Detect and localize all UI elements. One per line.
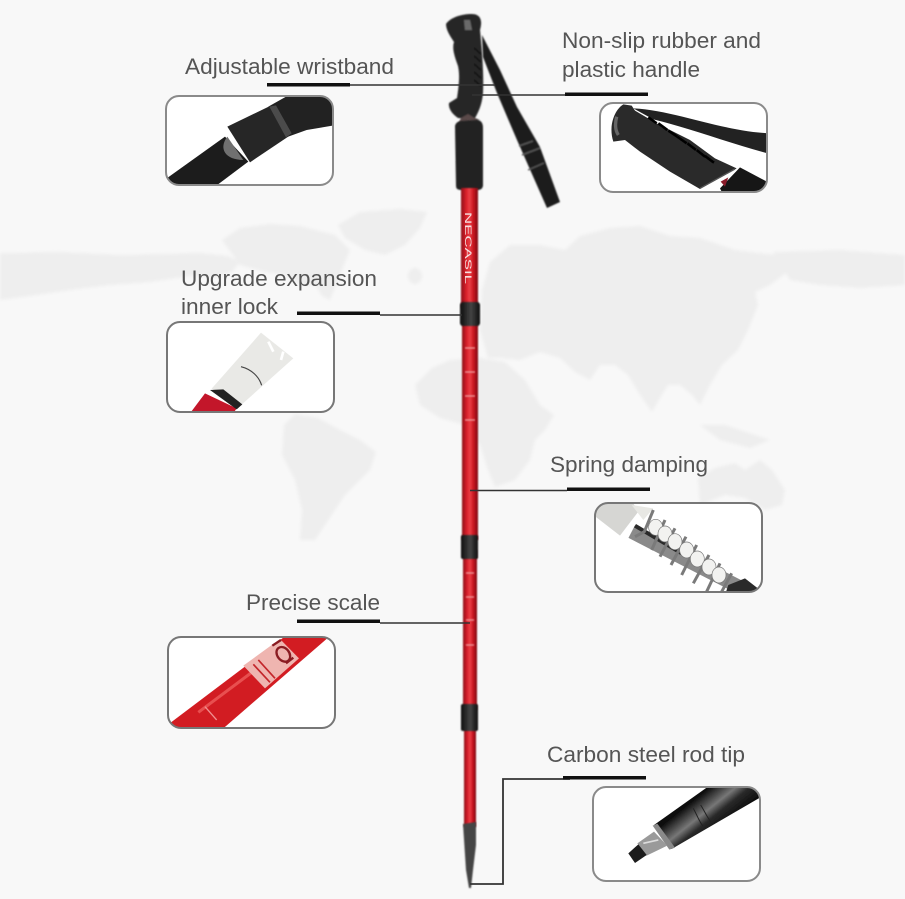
label second line: inner lock: [181, 294, 279, 319]
label: Adjustable wristband: [185, 54, 394, 79]
callout: spring damping: [470, 452, 762, 595]
label: Upgrade expansion: [181, 266, 377, 291]
label: Precise scale: [246, 590, 380, 615]
trekking pole: [446, 14, 560, 888]
leader line: [472, 94, 565, 96]
photo panel: [600, 103, 770, 195]
brand name: NECASIL: [462, 212, 473, 284]
label: Non-slip rubber and: [562, 28, 761, 53]
photo panel: [593, 503, 762, 595]
foam grip: [455, 120, 483, 190]
label second line: plastic handle: [562, 57, 700, 82]
leader line: [380, 622, 470, 624]
photo panel: [166, 93, 337, 187]
leader line: [470, 779, 570, 884]
aluminium shaft: [461, 188, 478, 827]
callout: handle: [472, 28, 770, 195]
rubber handle: [446, 14, 483, 124]
leader line: [470, 490, 567, 492]
lock collars: [460, 302, 480, 731]
callout: precise scale: [168, 590, 470, 729]
callout: carbon steel rod tip: [470, 742, 762, 884]
label: Spring damping: [550, 452, 708, 477]
leader line: [350, 84, 495, 86]
photo panel: [168, 636, 335, 729]
photo panel: [167, 322, 334, 417]
label: Carbon steel rod tip: [547, 742, 745, 767]
callout: inner lock: [167, 266, 462, 417]
carbon tip: [463, 822, 476, 888]
callout: adjustable wristband: [166, 54, 495, 187]
leader line: [380, 314, 462, 316]
photo panel: [593, 787, 762, 881]
strap: [482, 35, 560, 208]
scale marks: [465, 348, 475, 645]
world map watermark: [0, 209, 905, 540]
